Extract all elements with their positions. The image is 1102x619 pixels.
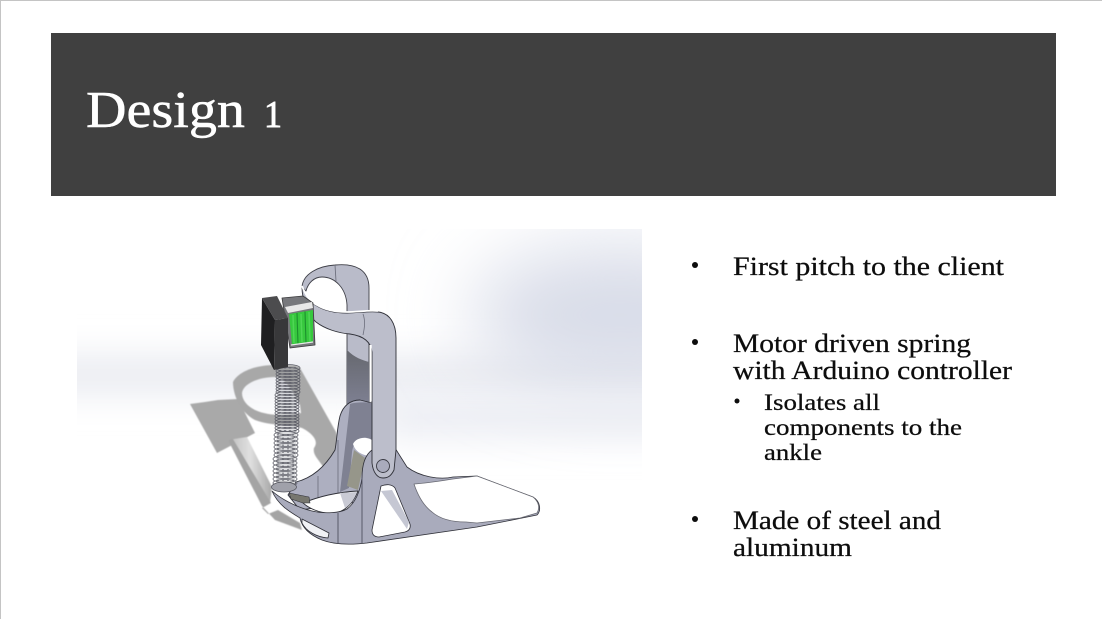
bullet: motor driven spring (692, 329, 1012, 385)
pivot joint (376, 460, 390, 472)
sub-bullet: isolates components: components to the (764, 415, 962, 440)
lower ankle plate (288, 400, 373, 513)
battery pack with green cells (282, 296, 315, 348)
bullet: first pitch: First pitch to the client (733, 252, 1005, 281)
sub-bullet: isolates components: Isolates all (764, 390, 880, 415)
green cells (289, 310, 313, 345)
sub-bullet: isolates components (734, 390, 962, 465)
triangle cut-out (372, 485, 410, 537)
floor tab (289, 493, 310, 503)
foot plate and base (272, 448, 540, 544)
bullet: materials: Made of steel and (733, 506, 941, 535)
cast shadow on floor (190, 365, 340, 530)
front cuff band and arm (302, 286, 396, 478)
small slot (302, 519, 329, 538)
foot white cut-out (414, 476, 539, 523)
spring (272, 364, 300, 492)
vertical seam lines (338, 478, 362, 544)
CAD render image: ankle brace design (77, 229, 642, 544)
bullet: motor driven spring: with Arduino controller (733, 356, 1012, 385)
title: Design (86, 82, 245, 139)
bullet: materials: aluminum (733, 533, 852, 562)
lens shadow (340, 492, 357, 508)
triangle inner shadow (381, 490, 409, 529)
bullet: motor driven spring: Motor driven spring (733, 329, 971, 358)
back upright and top cuff loop (302, 265, 369, 405)
sub-bullet: isolates components: ankle (764, 440, 822, 465)
title: 1 (264, 94, 282, 136)
header band (51, 33, 1056, 196)
bullet: materials (692, 506, 941, 562)
bullet list (692, 252, 1012, 562)
render background (77, 229, 642, 444)
motor housing block (261, 296, 288, 370)
white lens cut-out (303, 491, 358, 513)
